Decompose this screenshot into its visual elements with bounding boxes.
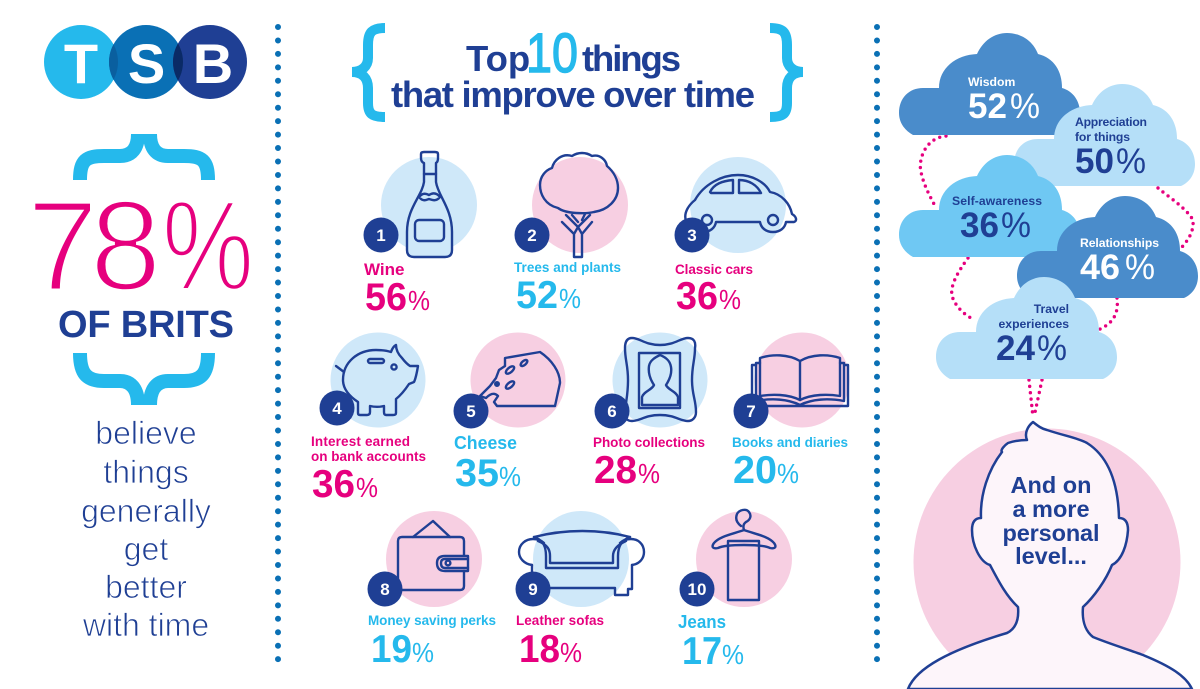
- item 5: cheese: Cheese: [454, 433, 517, 453]
- icon: sofa: [519, 531, 644, 595]
- text block: and on a more personal level: And on: [1011, 472, 1091, 498]
- item 3: classic cars: 3: [687, 226, 697, 245]
- item 10: jeans: Jeans: [678, 612, 726, 632]
- logo: TSB: T: [64, 32, 98, 95]
- dotted connectors between clouds: [920, 136, 1193, 417]
- cloud: self-awareness: %: [1001, 206, 1031, 245]
- logo: TSB: B: [193, 32, 233, 95]
- cloud: travel experiences: 24: [996, 329, 1036, 368]
- icon: cheese: [480, 352, 560, 406]
- item 4: interest on bank accounts: 36: [312, 463, 355, 506]
- item 7: books and diaries: %: [777, 458, 799, 489]
- text block: and on a more personal level: level...: [1015, 543, 1087, 569]
- cloud: wisdom: Wisdom: [968, 75, 1015, 89]
- title: [391, 21, 755, 115]
- item 1: wine: 56: [365, 276, 407, 319]
- item 8: money saving perks: Money saving perks: [368, 613, 496, 628]
- item 2: trees and plants: 52: [516, 274, 558, 317]
- person: head silhouette with pink circle: [908, 422, 1192, 689]
- icon: piggy bank: [336, 345, 418, 415]
- cloud: self-awareness: 36: [960, 206, 999, 245]
- item 8: money saving perks: %: [412, 637, 434, 668]
- item 8: money saving perks: 8: [380, 580, 390, 599]
- item 9: leather sofas: %: [560, 637, 582, 668]
- text block: believe things generally get better with time: better: [105, 569, 187, 605]
- text block: believe things generally get better with time: generally: [81, 493, 211, 529]
- title: 10: [526, 21, 578, 84]
- icon: wallet: [398, 521, 468, 590]
- item 1: wine: [364, 152, 477, 319]
- item 6: photo collections: %: [638, 458, 660, 489]
- cloud: appreciation for things: %: [1116, 142, 1146, 181]
- headline stat: 78%: %: [162, 175, 254, 318]
- title: Top: [466, 38, 530, 79]
- item 1: wine: Wine: [364, 260, 404, 279]
- item 10: jeans: %: [722, 639, 744, 670]
- item 9: leather sofas: 9: [528, 580, 538, 599]
- item 5: cheese: 5: [466, 402, 476, 421]
- icon: bottle: [407, 152, 452, 257]
- text block: believe things generally get better with time: [81, 415, 211, 643]
- headline stat: 78%: [27, 175, 254, 318]
- item 4: interest on bank accounts: on bank accounts: [311, 449, 426, 464]
- title brace right: [770, 28, 803, 117]
- text block: and on a more personal level: a more: [1012, 496, 1090, 522]
- item 4: interest on bank accounts: 4: [332, 399, 342, 418]
- item 3: classic cars: [674, 157, 796, 318]
- top brace: [80, 134, 208, 180]
- cloud: relationships: %: [1125, 248, 1155, 287]
- text block: believe things generally get better with time: get: [124, 531, 168, 567]
- cloud: relationships: Relationships: [1080, 236, 1159, 250]
- bottom brace: [80, 353, 208, 405]
- text block: believe things generally get better with time: things: [103, 454, 189, 490]
- item 7: books and diaries: Books and diaries: [732, 435, 848, 450]
- item 5: cheese: 35: [455, 452, 499, 495]
- item 3: classic cars: Classic cars: [675, 262, 753, 277]
- item 6: photo collections: [593, 332, 708, 492]
- cloud: appreciation for things: [1014, 84, 1195, 186]
- item 4: interest on bank accounts: Interest earned: [311, 434, 410, 449]
- item 2: trees and plants: 2: [527, 226, 537, 245]
- item 2: trees and plants: %: [559, 283, 581, 314]
- item 10: jeans: [678, 510, 792, 673]
- item 6: photo collections: 6: [607, 402, 617, 421]
- item 1: wine: 1: [376, 226, 386, 245]
- headline stat: 78%: 78: [27, 175, 161, 318]
- cloud: travel experiences: [936, 277, 1117, 379]
- cloud: self-awareness: Self-awareness: [952, 194, 1042, 208]
- item 6: photo collections: 28: [594, 449, 637, 492]
- cloud: wisdom: %: [1010, 87, 1040, 126]
- cloud: travel experiences: Travel: [1034, 302, 1069, 316]
- cloud: wisdom: [899, 33, 1080, 135]
- cloud: travel experiences: %: [1037, 329, 1067, 368]
- logo: TSB: [44, 25, 247, 99]
- item 6: photo collections: Photo collections: [593, 435, 705, 450]
- item 9: leather sofas: Leather sofas: [516, 613, 604, 628]
- title brace left: [352, 28, 385, 117]
- text block: believe things generally get better with time: with time: [82, 607, 209, 643]
- item 10: jeans: 17: [682, 630, 722, 673]
- cloud: appreciation for things: for things: [1075, 130, 1130, 144]
- item 7: books and diaries: 20: [733, 449, 777, 492]
- item 9: leather sofas: [516, 511, 644, 671]
- cloud: wisdom: 52: [968, 87, 1007, 126]
- item 2: trees and plants: Trees and plants: [514, 260, 621, 275]
- item 3: classic cars: %: [719, 284, 741, 315]
- item 2: trees and plants: [514, 153, 628, 317]
- title: that improve over time: [391, 74, 755, 115]
- item 8: money saving perks: 19: [371, 628, 412, 671]
- title: things: [582, 38, 681, 79]
- item 8: money saving perks: [368, 511, 496, 671]
- item 10: jeans: 10: [688, 580, 706, 599]
- icon: open book: [752, 355, 848, 406]
- item 9: leather sofas: 18: [519, 628, 560, 671]
- text block: believe things generally get better with time: believe: [95, 415, 197, 451]
- cloud: relationships: 46: [1080, 248, 1120, 287]
- item 7: books and diaries: 7: [746, 402, 756, 421]
- icon: picture frame: [625, 338, 696, 421]
- cloud: travel experiences: experiences: [999, 317, 1069, 331]
- item 5: cheese: %: [499, 461, 521, 492]
- text block: and on a more personal level: [1002, 472, 1100, 569]
- item 3: classic cars: 36: [676, 275, 718, 318]
- text block: and on a more personal level: personal: [1002, 520, 1100, 546]
- item 1: wine: %: [408, 285, 430, 316]
- subheading: of Brits: OF BRITS: [58, 304, 234, 346]
- cloud: relationships: [1017, 196, 1198, 298]
- item 4: interest on bank accounts: [311, 332, 426, 506]
- icon: tree: [540, 153, 618, 257]
- item 4: interest on bank accounts: %: [356, 472, 378, 503]
- cloud: appreciation for things: 50: [1075, 142, 1114, 181]
- item 5: cheese: [454, 332, 566, 495]
- item 7: books and diaries: [732, 332, 850, 492]
- logo: TSB: S: [128, 32, 165, 95]
- icon: car: [685, 175, 796, 232]
- cloud: appreciation for things: Appreciation: [1075, 115, 1147, 129]
- cloud: self-awareness: [899, 155, 1080, 257]
- icon: hanger with jeans: [713, 510, 775, 600]
